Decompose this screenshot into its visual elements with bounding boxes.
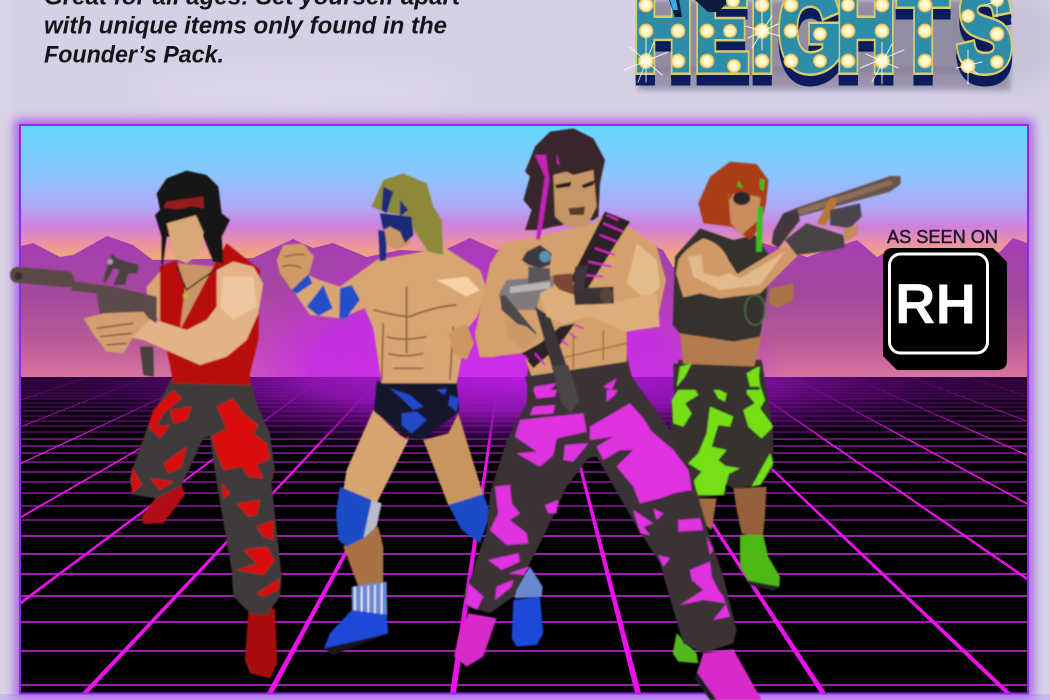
legs and boots xyxy=(324,410,491,655)
character: red camo soldier xyxy=(9,171,282,678)
intro text: with unique items only found in the xyxy=(44,12,447,40)
far blue boot xyxy=(512,567,543,647)
briefs xyxy=(374,382,459,439)
badge: as seen on RH xyxy=(883,227,1007,370)
pink camo pants xyxy=(463,355,737,653)
grid floor xyxy=(0,377,1050,693)
mountains xyxy=(21,236,1027,378)
midriff, arm and top xyxy=(673,162,901,390)
character: green camo soldier with shotgun xyxy=(670,162,901,663)
torso, tank top and arm xyxy=(9,171,263,385)
green camo shorts xyxy=(670,360,773,498)
red boots xyxy=(142,485,277,678)
character: blue masked wrestler xyxy=(277,173,543,655)
icon: suppressed rifle xyxy=(9,253,157,377)
panel border xyxy=(20,125,1028,694)
intro text: Founder’s Pack. xyxy=(44,42,224,68)
intro text xyxy=(44,0,461,68)
sky xyxy=(21,126,1027,267)
torso and bandolier xyxy=(475,128,666,390)
badge: as seen on RH: RH xyxy=(895,272,976,336)
hair and eyepatch xyxy=(698,162,768,240)
torso and arms xyxy=(277,173,487,383)
badge: as seen on RH: AS SEEN ON xyxy=(887,227,998,247)
red camo pants xyxy=(129,375,282,615)
head and hair xyxy=(155,171,230,273)
icon: shotgun xyxy=(772,176,901,248)
hands and forearm xyxy=(540,283,660,332)
pink boots xyxy=(454,613,762,700)
green boots and legs xyxy=(673,487,780,663)
horizon glow xyxy=(250,247,774,377)
hair and face xyxy=(523,128,605,230)
character: pink camo soldier xyxy=(454,128,762,700)
icon: assault rifle xyxy=(498,245,614,390)
rifle magazine xyxy=(552,365,579,413)
